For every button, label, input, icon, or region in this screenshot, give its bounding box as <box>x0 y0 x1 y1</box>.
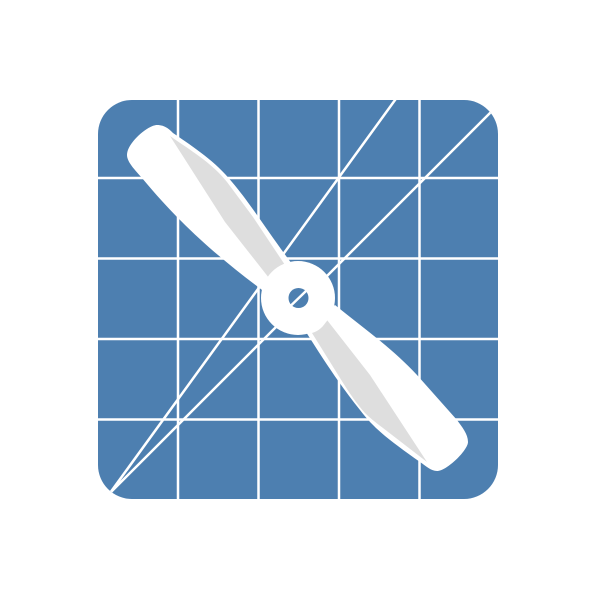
panel: blue rounded square <box>98 100 498 499</box>
hub <box>261 261 335 335</box>
propeller <box>127 125 468 471</box>
blueprint grid and diagonal lines <box>98 98 498 499</box>
line seen through hub hole <box>291 291 306 306</box>
blade: lower right <box>306 305 468 471</box>
icon: propeller on blueprint grid <box>98 100 498 499</box>
blade shading: upper left <box>170 136 285 278</box>
hub hole <box>288 288 308 308</box>
blade shading: lower right <box>312 320 427 462</box>
blade: upper left <box>127 125 292 290</box>
